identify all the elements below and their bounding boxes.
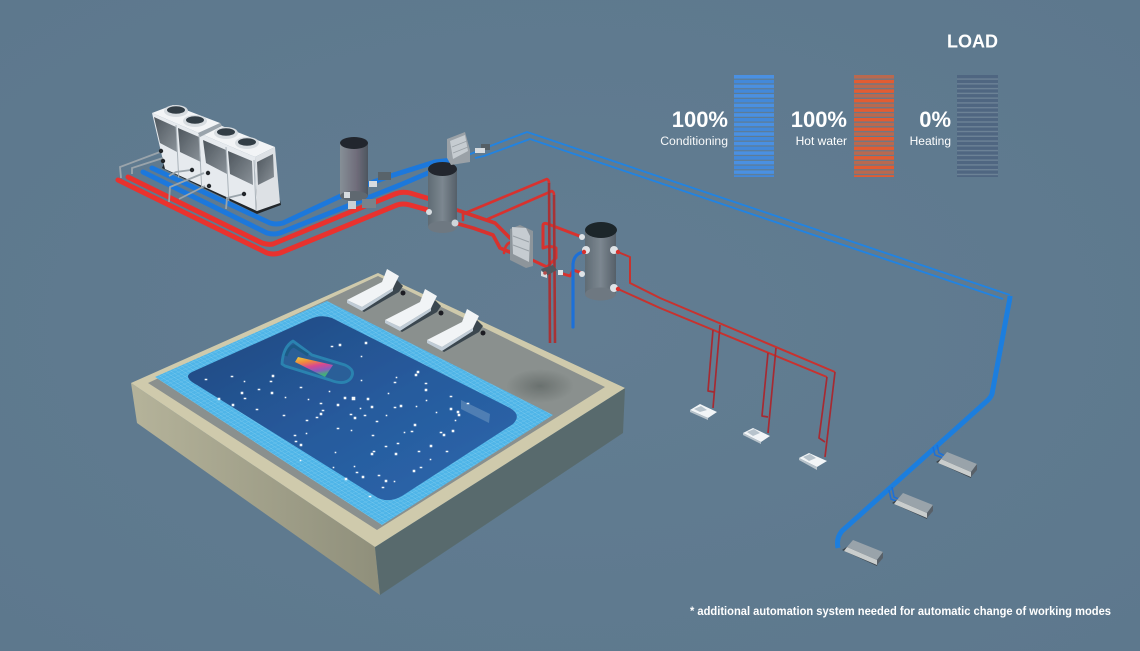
fan coil unit 1	[936, 452, 977, 478]
chiller valves	[159, 149, 246, 196]
conditioning value: 100%	[672, 107, 728, 132]
heating value: 0%	[919, 107, 951, 132]
fan coil unit 2	[892, 493, 933, 519]
red radiator distribution	[618, 252, 835, 377]
paving stain	[506, 369, 574, 403]
deck left side wall	[131, 383, 380, 595]
conditioning bar	[734, 75, 774, 177]
thick main pipes	[118, 160, 452, 254]
chiller long side	[152, 113, 257, 211]
fan 1	[164, 105, 188, 117]
heating bar	[957, 75, 998, 177]
chiller step	[198, 123, 222, 137]
outlet to tank 3	[560, 270, 582, 276]
storage tank 1	[340, 137, 368, 201]
plate heat exchanger upper	[447, 132, 490, 165]
lower thick blue run	[838, 296, 1010, 548]
footnote: * additional automation system needed for automatic change of working modes	[690, 606, 1111, 618]
riser 1	[463, 179, 549, 220]
blue thin riser	[573, 252, 583, 327]
radiator 1	[690, 404, 717, 420]
pool tile border	[155, 301, 553, 525]
float pillow	[286, 346, 308, 356]
load legend	[660, 32, 998, 177]
blue main pipe 2	[143, 172, 428, 234]
plate heat exchanger lower	[510, 225, 533, 268]
fan 2	[183, 115, 207, 127]
sun loungers	[347, 269, 486, 352]
pool ladder reflection	[461, 400, 490, 423]
pool float	[282, 341, 353, 383]
upper main	[618, 252, 835, 372]
legend title: LOAD	[947, 32, 998, 52]
pump	[541, 265, 563, 278]
exchanger outlet loop	[528, 223, 582, 267]
red main pipe 2	[118, 180, 428, 254]
deck right side wall	[375, 388, 625, 595]
riser 2	[488, 191, 554, 219]
lower main	[618, 289, 827, 377]
feed to exchanger	[455, 223, 512, 253]
chiller units	[152, 105, 281, 214]
float rainbow mat	[295, 357, 333, 377]
heating label: Heating	[910, 134, 951, 148]
upper blue line	[468, 132, 1010, 295]
storage tank 2	[426, 162, 458, 233]
fan 4	[235, 137, 259, 149]
pool water	[188, 316, 517, 500]
conditioning label: Conditioning	[660, 134, 728, 148]
return to exchanger	[457, 210, 510, 238]
blue branches to units	[889, 445, 945, 502]
red main pipe 1	[128, 177, 430, 244]
dark red vertical risers	[549, 183, 555, 343]
pool deck block	[131, 273, 625, 595]
unit dividers	[176, 125, 256, 210]
hot water value: 100%	[791, 107, 847, 132]
scene illustration	[118, 105, 1010, 595]
thin red circuit	[455, 179, 582, 276]
storage tank 3	[579, 222, 620, 300]
lounger 3	[427, 309, 486, 352]
fan coil unit 3	[842, 540, 883, 566]
chiller top	[152, 105, 275, 157]
float ring	[282, 341, 353, 383]
tank 3 fittings	[579, 234, 620, 292]
deck stone rim	[131, 273, 625, 547]
thin blue distribution pipes	[468, 132, 1010, 299]
blue main pipe 1	[152, 160, 452, 224]
paved surface	[148, 276, 605, 530]
fan 3	[214, 127, 238, 139]
lower blue line	[475, 139, 1003, 299]
radiator 3	[799, 453, 827, 470]
hot water label: Hot water	[796, 134, 847, 148]
chiller connection pipes	[120, 152, 244, 209]
red radiator drops	[708, 325, 835, 457]
water sparkles	[205, 342, 469, 497]
chiller end side	[255, 147, 280, 211]
radiator 2	[743, 428, 770, 444]
lounger 2	[385, 289, 444, 332]
hot water bar	[854, 75, 894, 177]
chiller base shadow	[162, 150, 281, 214]
coil windows	[154, 117, 274, 185]
lounger 1	[347, 269, 406, 312]
valves near tank 1	[344, 172, 391, 209]
